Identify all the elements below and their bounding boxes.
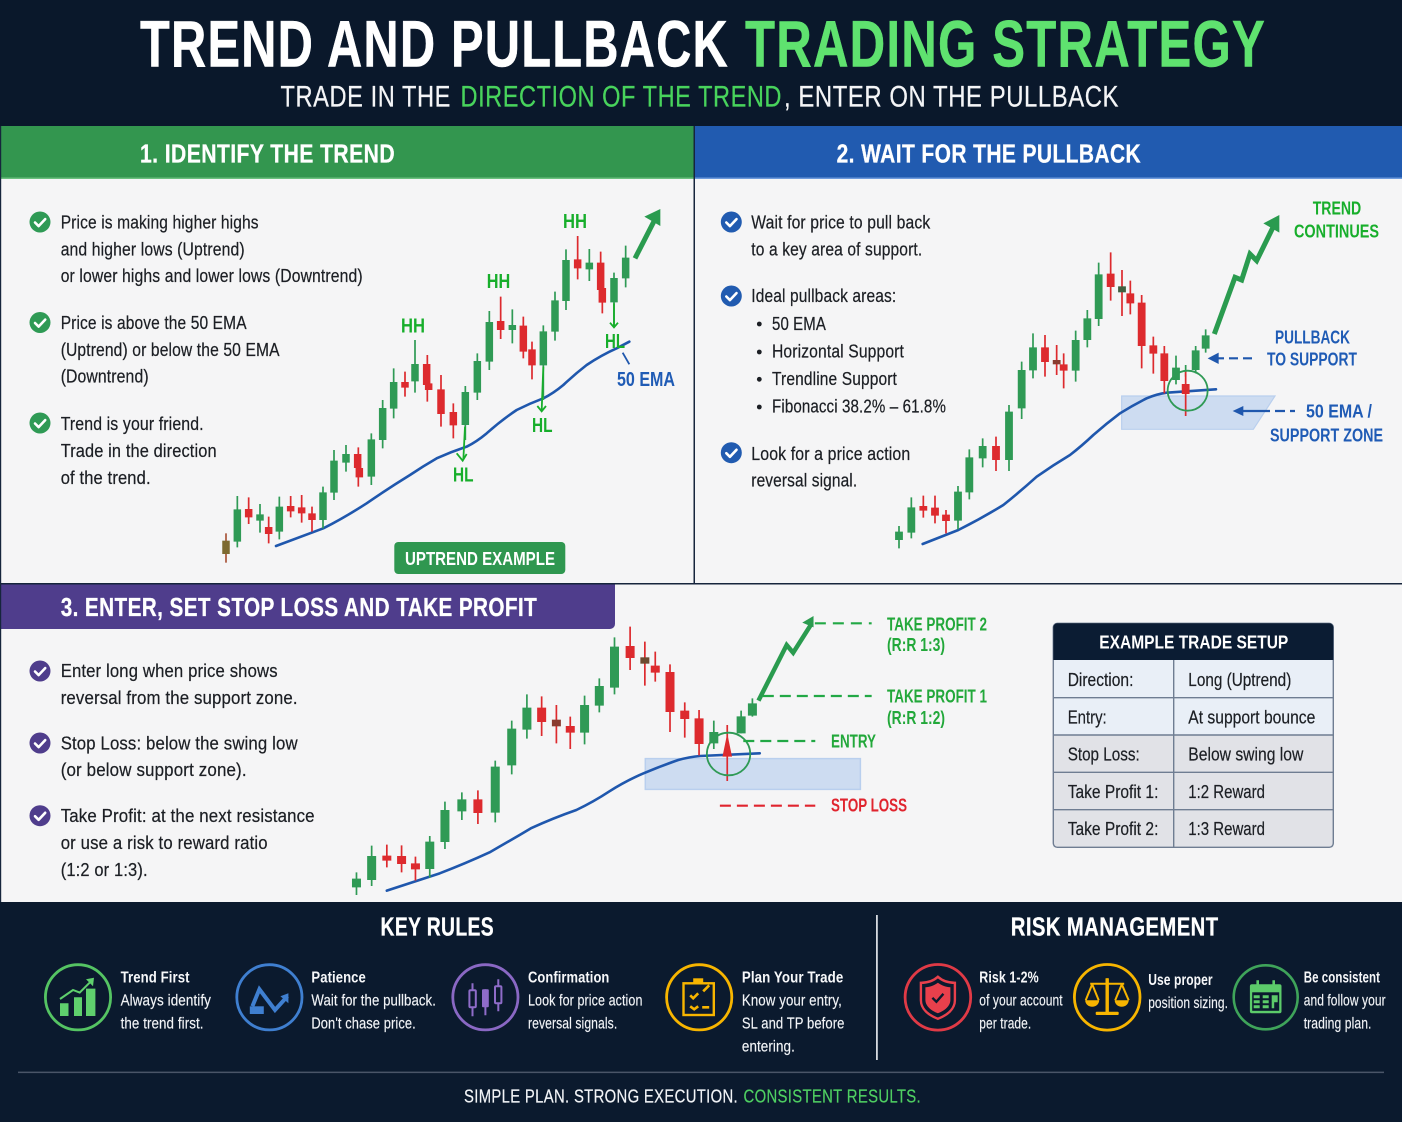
risk text: position sizing: position sizing. (1148, 995, 1228, 1012)
table: example trade setup (1053, 623, 1333, 847)
rule text: patience: Wait for the pullback. (311, 992, 436, 1009)
panel header: step 2 (694, 126, 1402, 179)
text block: enter long: reversal from the support zone. (61, 687, 298, 708)
icon: scales (1074, 964, 1140, 1030)
section: risk management (905, 914, 1386, 1032)
rule text: plan your trade: Plan Your Trade (742, 969, 843, 986)
panel: 1 identify the trend (0, 126, 694, 584)
panel: 3 enter, stop loss, take profit (0, 584, 1402, 902)
rule text: trend first: the trend first. (121, 1015, 204, 1032)
table rows: 1:2 Reward (1188, 782, 1265, 802)
table rows: Take Profit 1: (1068, 782, 1158, 802)
label: stop loss: STOP LOSS (831, 795, 907, 815)
text block: ideal pullback areas: Fibonacci 38.2% – 61.8% (772, 396, 946, 417)
risk text: be consistent (1304, 969, 1386, 1032)
text block: enter long (61, 660, 298, 708)
highlight circle (1168, 371, 1208, 411)
risk text: position sizing (1148, 972, 1228, 1012)
arrow: trend continues (1214, 215, 1279, 334)
arrow: support zone (1233, 406, 1295, 416)
arrow: price target (758, 616, 814, 701)
risk text: risk 1-2%: Risk 1-2% (979, 969, 1039, 986)
table rows: Direction: (1068, 670, 1133, 690)
table rows (1068, 670, 1315, 839)
footer tagline: SIMPLE PLAN. STRONG EXECUTION. (464, 1087, 738, 1107)
risk text: be consistent: trading plan. (1304, 1015, 1372, 1032)
text block: take profit: (1:2 or 1:3). (61, 859, 148, 880)
arrow: trend up (635, 209, 660, 258)
rule text: patience (311, 969, 436, 1032)
rule text: trend first: Always identify (121, 992, 211, 1009)
labels: HH and HL: HH (401, 316, 425, 338)
text block: stop loss (61, 733, 298, 780)
text block: ideal pullback areas: Horizontal Support (772, 341, 904, 362)
subtitle: DIRECTION OF THE TREND (460, 80, 782, 114)
label: take profit 1: (R:R 1:2) (887, 708, 945, 728)
icon: check (30, 312, 50, 333)
rule text: confirmation: reversal signals. (528, 1015, 617, 1032)
table rows: Take Profit 2: (1068, 819, 1158, 839)
label: trend continues: CONTINUES (1294, 221, 1379, 242)
highlight circle (707, 733, 750, 775)
labels: HH and HL: HL (532, 415, 552, 437)
icon: check (721, 442, 742, 463)
text block: ideal pullback areas (751, 285, 946, 417)
icon: check (721, 212, 742, 232)
text block: ideal pullback areas: Trendline Support (772, 368, 897, 389)
panel header: step 1 (0, 126, 694, 179)
text block: trend is your friend: Trend is your friend. (61, 413, 204, 434)
icon: check (30, 660, 50, 682)
arrows: higher lows (457, 303, 618, 461)
rule text: patience: Don't chase price. (311, 1015, 416, 1032)
text block: take profit: Take Profit: at the next resistance (61, 805, 315, 826)
rule text: patience: Patience (311, 969, 366, 986)
icon: trend first (45, 965, 111, 1030)
table rows: Stop Loss: (1068, 745, 1140, 765)
dashed level: take profit 1 (763, 695, 872, 697)
text block: take profit: or use a risk to reward ratio (61, 832, 268, 853)
panel header: step 2: 2. WAIT FOR THE PULLBACK (837, 140, 1141, 168)
label: take profit 2: TAKE PROFIT 2 (887, 615, 987, 635)
icon: check (30, 732, 50, 754)
icon: calendar (1234, 965, 1298, 1029)
icon: check (30, 805, 50, 826)
icon: check (30, 212, 50, 232)
label: 50 EMA support zone: 50 EMA / (1306, 400, 1372, 421)
text block: reversal signal: reversal signal. (751, 470, 857, 491)
text block: higher highs (61, 212, 363, 286)
rule text: confirmation (528, 969, 642, 1032)
rule text: trend first (121, 969, 211, 1032)
table rows: Entry: (1068, 708, 1107, 728)
panel header: step 1: 1. IDENTIFY THE TREND (140, 140, 395, 168)
risk text: position sizing: Use proper (1148, 972, 1213, 989)
labels: HH and HL: HL (605, 331, 625, 353)
text block: take profit (61, 805, 315, 880)
heading: risk management: RISK MANAGEMENT (1011, 914, 1218, 942)
text block: enter long: Enter long when price shows (61, 660, 278, 681)
rule text: plan your trade: Know your entry, (742, 992, 842, 1009)
risk text: risk 1-2%: of your account (979, 992, 1063, 1009)
text block: trend is your friend: of the trend. (61, 467, 151, 488)
bullet list: identify the trend (30, 212, 363, 488)
rule text: plan your trade: SL and TP before (742, 1015, 844, 1032)
support zone (1122, 396, 1275, 429)
title: TREND AND PULLBACK (140, 6, 729, 80)
labels: HH and HL: HL (453, 465, 474, 487)
text block: higher highs: or lower highs and lower lows (Downtrend) (61, 265, 363, 286)
footer tagline: CONSISTENT RESULTS. (744, 1087, 921, 1107)
subtitle: TRADE IN THE (280, 80, 451, 114)
label: trend continues (1294, 197, 1379, 242)
table rows: Long (Uptrend) (1188, 670, 1291, 690)
table rows: 1:3 Reward (1188, 819, 1265, 839)
candlestick chart: uptrend (226, 209, 660, 563)
text block: higher highs: Price is making higher highs (61, 212, 259, 233)
icon: patience (237, 965, 302, 1030)
label: trend continues: TREND (1313, 197, 1361, 218)
text block: stop loss: (or below support zone). (61, 759, 247, 780)
text block: 50 EMA (61, 312, 280, 386)
text block: stop loss: Stop Loss: below the swing low (61, 733, 298, 754)
label: take profit 2: (R:R 1:3) (887, 635, 945, 655)
text block: wait for price: to a key area of support. (751, 238, 922, 259)
text block: ideal pullback areas: 50 EMA (772, 313, 826, 334)
icon: plan your trade (667, 965, 732, 1030)
dashed level: entry (743, 740, 815, 742)
label: pullback to support: TO SUPPORT (1267, 349, 1358, 370)
subtitle (280, 80, 1119, 114)
risk text: risk 1-2%: per trade. (979, 1015, 1031, 1032)
dashed level: take profit 2 (815, 622, 872, 624)
icon: check (30, 412, 50, 434)
heading: key rules: KEY RULES (380, 914, 494, 942)
table rows: At support bounce (1188, 708, 1315, 728)
text block: reversal signal: Look for a price action (751, 443, 910, 464)
label: 50 EMA: 50 EMA (617, 369, 675, 391)
text block: 50 EMA: Price is above the 50 EMA (61, 312, 247, 333)
text block: 50 EMA: (Downtrend) (61, 366, 149, 386)
text block: 50 EMA: (Uptrend) or below the 50 EMA (61, 339, 280, 360)
support zone (645, 759, 860, 789)
labels: HH and HL (401, 211, 625, 487)
footer band (0, 902, 1402, 1122)
table rows: Below swing low (1188, 745, 1304, 765)
bullet list: entry rules (30, 660, 315, 880)
text block: higher highs: and higher lows (Uptrend) (61, 238, 245, 259)
table header (1053, 623, 1333, 660)
panel header: step 3: 3. ENTER, SET STOP LOSS AND TAKE PROFIT (61, 594, 537, 622)
text block: trend is your friend: Trade in the direction (61, 440, 217, 461)
risk text: risk 1-2% (979, 969, 1063, 1032)
panel header: step 3 (0, 584, 615, 629)
rule text: confirmation: Look for price action (528, 992, 642, 1009)
label: pullback to support: PULLBACK (1275, 326, 1350, 347)
label: pullback to support (1267, 326, 1358, 370)
candlestick chart: pullback (899, 215, 1295, 548)
text block: wait for price (751, 212, 931, 259)
arrow: pullback to support (1208, 353, 1255, 364)
label: take profit 1: TAKE PROFIT 1 (887, 687, 987, 707)
label: 50 EMA support zone (1270, 400, 1383, 446)
label: take profit 2 (887, 615, 987, 655)
label: entry: ENTRY (831, 732, 876, 752)
labels: HH and HL: HH (487, 271, 510, 293)
panel: 2 wait for the pullback (694, 126, 1402, 584)
icon: check (721, 286, 742, 306)
dashed level: stop loss (720, 805, 815, 807)
rule text: plan your trade: entering. (742, 1038, 795, 1056)
subtitle: , ENTER ON THE PULLBACK (784, 80, 1119, 114)
candlestick chart: entry (356, 616, 872, 895)
badge: uptrend example: UPTREND EXAMPLE (405, 548, 555, 569)
section: key rules (45, 914, 844, 1056)
table header: EXAMPLE TRADE SETUP (1099, 631, 1288, 652)
icon: shield (905, 964, 971, 1030)
label: take profit 1 (887, 687, 987, 728)
bullet list: pullback (721, 212, 946, 491)
text block: wait for price: Wait for price to pull back (751, 212, 931, 233)
labels: HH and HL: HH (563, 211, 587, 233)
title banner (140, 6, 1266, 114)
text block: ideal pullback areas: Ideal pullback areas: (751, 285, 896, 306)
rule text: plan your trade (742, 969, 844, 1056)
rule text: confirmation: Confirmation (528, 969, 609, 986)
text block: reversal signal (751, 443, 910, 491)
icon: confirmation (453, 965, 518, 1030)
leader line: 50 EMA (623, 353, 629, 364)
badge: uptrend example (394, 542, 565, 574)
text block: trend is your friend (61, 413, 217, 488)
rule text: trend first: Trend First (121, 969, 190, 986)
